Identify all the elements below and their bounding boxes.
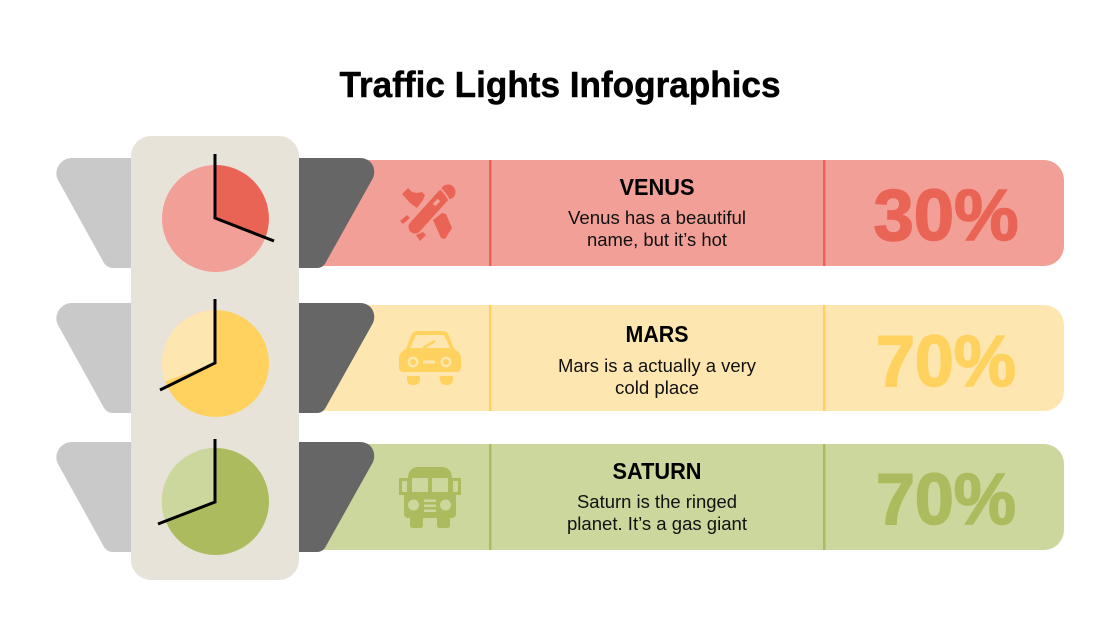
text: mars description: cold place bbox=[615, 378, 699, 398]
light: green pie bbox=[158, 439, 269, 555]
heading: mars: MARS bbox=[626, 321, 688, 347]
title: Traffic Lights Infographics bbox=[340, 64, 780, 105]
panel: saturn bar bbox=[320, 444, 1064, 550]
traffic light housing bbox=[131, 136, 299, 580]
percentage: mars: 70% bbox=[876, 322, 1016, 402]
text: saturn description bbox=[567, 492, 747, 534]
visor: right middle bbox=[295, 303, 374, 413]
text: mars description bbox=[558, 356, 756, 398]
heading: venus: VENUS bbox=[620, 174, 694, 200]
icon: airplane bbox=[400, 184, 456, 241]
text: venus description: Venus has a beautiful bbox=[568, 208, 746, 228]
text: venus description: name, but it’s hot bbox=[587, 230, 727, 250]
icon: bus bbox=[400, 467, 460, 528]
percentage: saturn: 70% bbox=[876, 460, 1016, 540]
visor: left bottom bbox=[56, 442, 135, 552]
visor: right bottom bbox=[295, 442, 374, 552]
text: mars description: Mars is a actually a very bbox=[558, 356, 756, 376]
visor: right top bbox=[295, 158, 374, 268]
icon: car bbox=[399, 331, 461, 385]
panel: venus bar bbox=[320, 160, 1064, 266]
text: saturn description: planet. It’s a gas giant bbox=[567, 514, 747, 534]
text: venus description bbox=[568, 208, 746, 250]
heading: saturn: SATURN bbox=[612, 458, 702, 484]
visor: left top bbox=[56, 158, 135, 268]
panel: mars bar bbox=[320, 305, 1064, 411]
percentage: venus: 30% bbox=[874, 176, 1018, 256]
light: red pie bbox=[162, 154, 274, 272]
light: yellow pie bbox=[160, 299, 269, 417]
visor: left middle bbox=[56, 303, 135, 413]
text: saturn description: Saturn is the ringed bbox=[577, 492, 737, 512]
